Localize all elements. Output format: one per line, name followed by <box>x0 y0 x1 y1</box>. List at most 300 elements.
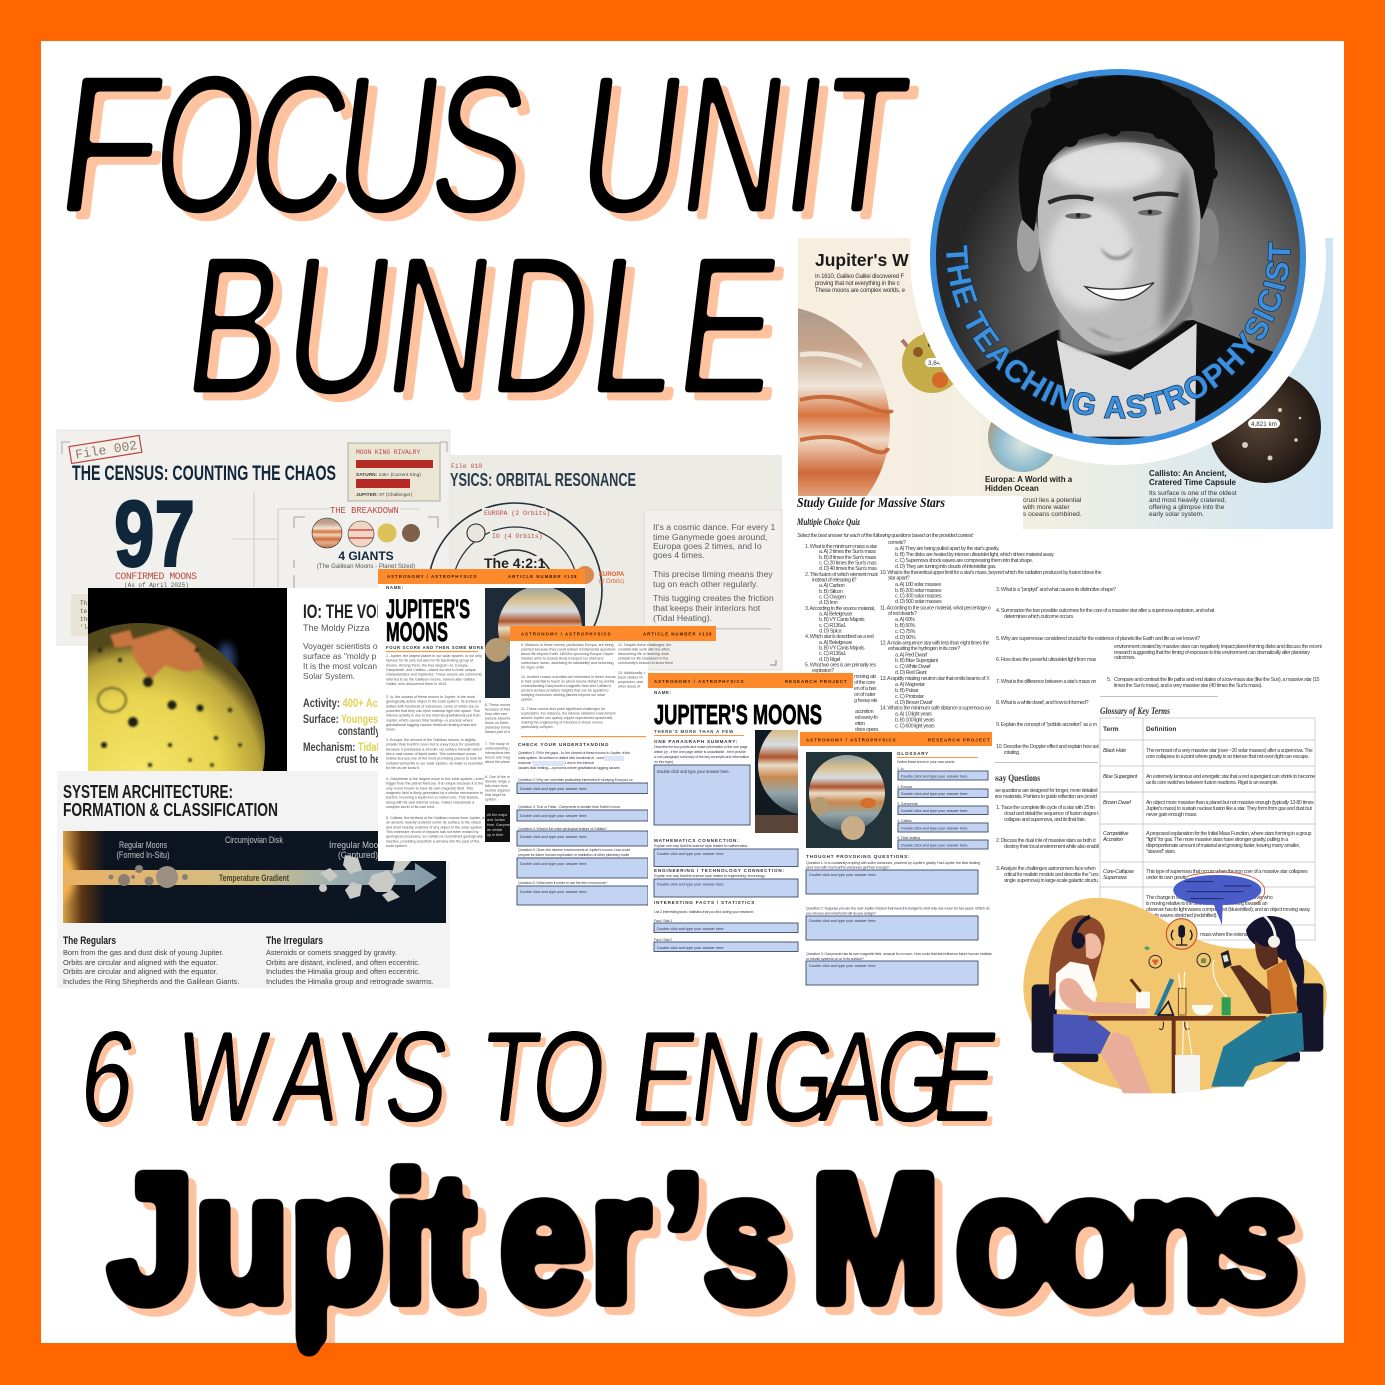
glossary table: Competitive <box>1103 831 1128 837</box>
quiz column 2: c. C) 300 solar masses <box>895 594 942 600</box>
panel: System Architecture slide: FORMATION & CLASSIFICATION <box>63 800 278 820</box>
header bar: ARTICLE NUMBER #138 <box>643 632 713 636</box>
glossary answer boxes: 2. Europa <box>897 785 913 789</box>
circular brand text: THE TEACHING ASTROPHYSICIST <box>946 242 1291 419</box>
thought question boxes: Double click and type your answer here. <box>809 873 877 877</box>
panel: article page 2: other areas of <box>618 684 640 688</box>
partial text fragments between pages: etion <box>855 721 865 727</box>
panel: Orbital Resonance slide: File 010 <box>451 463 482 470</box>
sticky note fragment: tel <box>80 608 91 615</box>
title lettering: O <box>143 36 270 254</box>
panel: Io volcanic slide: surface as "moldy p <box>303 651 377 661</box>
panel: article page 2: Question 5: Given the diverse environments of Jupiter's moons, how could <box>518 848 630 852</box>
panel: research project page 4: GLOSSARY <box>897 751 929 756</box>
article 2 body: about life beyond Earth. NASA's upcoming Europa Clipper <box>521 652 615 656</box>
second column fragment: forces and magnetic <box>485 756 518 760</box>
panel: article page 2: Question 4: What is the main geological feature of Callisto? <box>518 827 607 831</box>
panel: Orbital Resonance slide: (2 Orbits) <box>599 579 624 585</box>
second column fragment: those on Earth. <box>485 721 509 725</box>
panel: research project page 3: List 2 interesting facts / statistics that you find during your research: <box>654 910 754 914</box>
quiz column 2: a. A) 100 solar masses <box>895 582 942 588</box>
article body text: complex world of its own kind. <box>386 805 435 809</box>
subtitle: 6 ways to engage: 6 WAYS TO ENGAGE <box>79 1010 1010 1153</box>
hair <box>1019 75 1215 232</box>
article body text: inactive, providing scientists a window into the past of the <box>386 839 479 843</box>
quiz column 2: 13. A rapidly rotating neutron star that emits beams of X <box>880 676 990 682</box>
panel: Io volcanic slide: Voyager scientists o <box>303 641 378 651</box>
article body text: characteristics and mysteries. These moons are commonly <box>386 673 482 677</box>
quiz column 2: d. D) 90% <box>895 635 916 641</box>
explanatory text box: This precise timing means they <box>653 569 773 579</box>
article 2 body: particularly complex. <box>521 725 554 729</box>
panel: research project page 3: Double click and type your answer here. <box>657 852 725 856</box>
panel: article page 2: 12. Despite these challenges, the <box>618 643 671 647</box>
illustration: two people listening to a podcast <box>1023 872 1327 1093</box>
panel: article page 2: prepare for future human exploration or habitation of other planetary bodie <box>518 853 629 857</box>
panel: Study Guide document: single supernova) to large-scale galactic structu <box>1004 878 1098 884</box>
quiz column 2: d. D) They are turning into clouds of interstellar gas. <box>895 564 996 570</box>
panel: research project page 4: THOUGHT PROVOKING QUESTIONS: <box>806 854 910 859</box>
header bar <box>800 732 992 746</box>
second column fragment: diverse range of <box>485 780 511 784</box>
title lettering: U <box>568 36 697 254</box>
article 2 body: ancient surface provides insights that can be applied to <box>521 688 609 692</box>
article body text: Jupiter, which causes tidal heating—a process where <box>386 718 473 722</box>
quiz column 1: a. A) Betelgeuse <box>819 612 852 618</box>
essay question continuation <box>1107 644 1322 689</box>
essay question continuation: Compare and contrast the life paths and end states of a low-mass star (like the Sun), a massive star (15 <box>1114 677 1320 683</box>
explanatory text box: that keeps their interiors hot <box>653 603 761 613</box>
second column fragment: system. <box>485 798 497 802</box>
header bar: RESEARCH PROJECT <box>785 679 848 684</box>
quiz column 2: a. A) They are being pulled apart by the star's gravity. <box>895 546 999 552</box>
quiz column 1: a. A) 2 times the Sun's mass <box>819 549 876 555</box>
glossary table: has its waves stretched (redshifted). <box>1146 913 1217 919</box>
glossary answer boxes: 5. Tidal heating <box>897 836 920 840</box>
moon rivalry note: JUPITER: 97 (Challenger) <box>356 492 413 498</box>
answer boxes: Double click and type your answer here. <box>520 787 588 791</box>
quiz column 1: d. D) 40 times the Sun's mas <box>819 566 877 572</box>
short-answer column: 4. Summarize the two possible outcomes for the core of a massive star after a supernova explosion, and what <box>996 608 1215 614</box>
panel: Study Guide document: urce materials. Pointers to guide reflection are provid <box>993 794 1097 800</box>
panel: Jupiter's Worlds poster: Callisto: An Ancient, <box>1149 469 1227 478</box>
quiz column 2: c. C) 75% <box>895 629 916 635</box>
panel: Study Guide document: collapse and supernova, and its final fate. <box>1004 817 1086 823</box>
moon rivalry note <box>348 443 440 501</box>
glossary table: Brown Dwarf <box>1103 800 1131 806</box>
panel: article page 1: an orbital <box>487 828 502 832</box>
quiz column 1: a. A) Carbon <box>819 583 845 589</box>
header bar: ARTICLE NUMBER #138 <box>508 574 578 579</box>
quiz column 2 <box>880 540 1102 730</box>
panel: article page 2: Question 2: Why are scientists particularly interested in studying Europa's oc <box>518 778 633 782</box>
second column fragment: tide-rises from <box>485 784 508 788</box>
quiz column 1: 1. What is the minimum mass a star <box>805 544 877 550</box>
panel: research project page 4: Question 3: Ganymede has its own magnetic field, unusual for a moon. How could that field influence future human habitats <box>806 952 992 956</box>
panel: Io volcanic slide: crust to he <box>336 754 380 766</box>
panel: article page 2: Question 6: What does it mean to use the term exomoons? <box>518 881 607 885</box>
glossary table: observer has its light waves compressed (blueshifted), and an object moving away <box>1146 907 1310 913</box>
panel: article page 1: NAME: <box>386 585 404 590</box>
panel: The Census slide <box>57 430 450 645</box>
panel: research project page 3: Double click and type your answer here. <box>657 882 725 886</box>
yellow blob <box>1023 898 1327 1093</box>
header bar <box>510 626 716 641</box>
panel: Orbital Resonance slide: YSICS: ORBITAL RESONANCE <box>450 470 636 490</box>
panel: Jupiter's Worlds poster: early solar system. <box>1149 511 1204 518</box>
title lettering: F <box>47 35 176 254</box>
partial text fragments between pages: g heavy ele <box>854 698 877 704</box>
portrait badge: The Teaching Astrophysicist <box>910 69 1326 465</box>
glossary answer boxes <box>897 767 988 849</box>
article 2 body: making the engineering of missions to these moons <box>521 720 603 724</box>
text block: the regulars: Orbits are circular and aligned with the equator. <box>63 967 218 976</box>
glossary table: An extremely luminous and energetic star that a red supergiant can shrink to become <box>1146 774 1315 780</box>
panel: research project page 3: a one paragraph summary of the key concepts and information <box>654 755 749 759</box>
glossary table: An object more massive than a planet but not massive enough (typically 13-80 times <box>1146 800 1314 806</box>
quiz column 2: d. D) Red Giant <box>895 670 927 676</box>
quiz column 1 <box>805 544 878 674</box>
partial text fragments between pages: accretion <box>855 709 874 715</box>
sticky note fragment: the <box>80 616 91 623</box>
panel: Orbital Resonance slide: EUROPA (2 Orbits) <box>484 510 550 517</box>
glossary table: is moving relative to the source. An object moving towards an <box>1146 901 1268 907</box>
title: Focus Unit Bundle <box>47 35 928 443</box>
quiz column 2: b. B) Pulsar <box>895 688 919 694</box>
quiz column 2: c. C) 600 light years <box>895 724 935 730</box>
quiz column 1: c. C) R136a1 <box>819 651 846 657</box>
second column fragment: planets elsewhere <box>485 716 514 720</box>
glossary heading: Glossary of Key Terms <box>1100 706 1170 716</box>
panel: Study Guide document: Select the best answer for each of the following questions based on the provided context: <box>797 533 974 539</box>
article 2 body: 10. Another reason scientists are interested in these moons <box>521 675 616 679</box>
article body text: moon. <box>386 728 396 732</box>
quiz column 1: d. D) Spica <box>819 628 842 634</box>
quiz column 2: b. B) The disks are heated by intense ultraviolet light, which drives material away <box>895 552 1054 558</box>
answer boxes <box>517 783 648 905</box>
second column fragment: understanding of <box>485 746 512 750</box>
panel: article page 1: and Jovian <box>487 818 505 822</box>
sticky note fragment: 'los <box>80 624 95 631</box>
glossary table: Blue Supergiant <box>1103 774 1138 780</box>
moon rivalry note: SATURN: 146+ (Current King) <box>356 472 421 478</box>
article body text: an ancient, heavily cratered world. Its surface is the oldest <box>386 821 481 825</box>
thought question boxes <box>806 870 978 985</box>
essay question continuation: 5. <box>1107 677 1111 683</box>
panel: research project page 3: Explain one way that this science topic relates to engineering / technology. <box>654 874 765 878</box>
icon: heart and thumbs badges <box>1144 946 1210 968</box>
second column fragment: interactions between <box>485 751 518 755</box>
panel: research project page 3: Fact / Stat 1 <box>654 919 672 923</box>
text block: the irregulars: The Irregulars <box>266 935 323 947</box>
article body text: Earth's, involving a liquid iron or nickel core. This feature, <box>386 796 479 800</box>
quiz column 1: b. B) VY Canis Majoris <box>819 646 865 652</box>
article 2 body: studying exomoons orbiting planets beyond our solar <box>521 693 606 697</box>
panel: article page 2: propulsion, and <box>618 680 643 684</box>
short-answer column: 6. How does the powerful ultraviolet light from mas <box>996 657 1097 663</box>
title lettering: L <box>579 217 691 435</box>
panel: Io volcanic slide: Activity: 400+ Act <box>303 698 381 710</box>
quiz column 2: star apart? <box>888 576 910 582</box>
answer boxes: Double click and type your answer here. <box>520 862 588 866</box>
panel: Orbital Resonance slide: The 4:2:1 <box>484 555 546 571</box>
slide heading: SYSTEM ARCHITECTURE: <box>63 782 233 802</box>
headline: Jupiter's Moons: Jupiter’s Moons <box>116 1144 1307 1348</box>
short-answer column: 8. What is a white dwarf, and how is it formed? <box>996 700 1089 706</box>
title lettering: I <box>773 36 839 254</box>
glossary answer boxes: Double click and type your answer here. <box>901 809 969 813</box>
quiz column 2: a. A) 60% <box>895 617 915 623</box>
header bar: ASTRONOMY / ASTROPHYSICS <box>521 632 612 636</box>
panel: article page 2: considerable work with the effort, <box>618 648 670 652</box>
quiz column 1: 3. According to the source material, <box>805 606 876 612</box>
temperature gradient diagram: Irregular Moons <box>329 840 387 851</box>
chairs <box>1032 983 1323 1062</box>
panel: Io volcanic slide: Solar System. <box>303 671 355 681</box>
panel: research project page 3: Fact / Stat 2 <box>654 938 672 942</box>
summary answer box <box>654 765 750 825</box>
text block: the regulars: Born from the gas and dust disk of young Jupiter. <box>63 948 224 957</box>
short-answer column: rotating. <box>1004 750 1020 756</box>
article 2 body: for signs of life. <box>521 666 545 670</box>
panel: Jupiter's Worlds poster: and most heavily cratered, <box>1149 497 1226 504</box>
panel: Io volcanic slide <box>88 588 378 771</box>
title shadow: U <box>577 44 706 262</box>
panel: article page 1: All the major <box>487 813 508 817</box>
photo of Io <box>88 623 265 771</box>
panel: article page 2: reasons! This volcanic activity is due to the internal <box>518 761 594 765</box>
panel: article page 2: 13. Additionally, t <box>618 671 645 675</box>
panel: article page 1: up in their <box>487 833 504 837</box>
panel: article page 2: Each rotates mi <box>618 676 643 680</box>
glossary table: The change in wavelength of light in relation to an observer who <box>1146 895 1273 901</box>
project title: JUPITER'S MOONS <box>654 699 822 730</box>
panel: research project page 4: you choose and what tools will do you assign? <box>806 912 876 916</box>
moon rivalry note: MOON KING RIVALRY <box>356 449 420 456</box>
temperature gradient diagram: (Captured) <box>338 850 378 861</box>
article body text: dotted with hundreds of volcanoes, some of which are so <box>386 704 479 708</box>
quiz column 1: c. C) Oxygen <box>819 594 846 600</box>
study guide heading: Study Guide for Massive Stars <box>797 496 945 511</box>
header bar: ASTRONOMY / ASTROPHYSICS <box>387 574 478 579</box>
article 2 body: exploration. For instance, the intense radiation environment <box>521 712 616 716</box>
quiz column 1: 5. What two ores is are primarily res <box>805 662 877 668</box>
title lettering: U <box>324 35 454 254</box>
glossary answer boxes: 4. Callisto <box>897 819 912 823</box>
panel: research project page 3: Explain one way that this science topic relates to mathematics. <box>654 844 748 848</box>
panel: Study Guide document: ese questions are designed for longer, more detailed <box>993 788 1098 794</box>
title shadow: I <box>782 44 848 262</box>
big number 97: 97 <box>114 481 195 586</box>
article body text: and most heavily cratered of any object in the solar system. <box>386 825 483 829</box>
article 2 body: is their potential to teach us about moons distant by worlds. <box>521 680 615 684</box>
temperature gradient diagram: Circumjovian Disk <box>225 835 283 846</box>
panel: The Census slide: (As of April 2025) <box>124 582 189 589</box>
explanatory text box: This tugging creates the friction <box>653 593 774 603</box>
article body text: geological processes, so Callisto is considered geologically <box>386 835 483 839</box>
article 2 body: 9. Missions to these moons, particularly Europa, are being <box>521 643 614 647</box>
short-answer column: 3. What is a "proplyd" and what causes its distinctive shape? <box>996 587 1116 593</box>
text block: the regulars: Orbits are circular and aligned with the equator. <box>63 958 218 967</box>
article body text <box>386 654 485 848</box>
title lettering: N <box>376 217 505 435</box>
quiz column 2: d. D) 500 solar masses <box>895 599 942 605</box>
panel: research project page 3: INTERESTING FACTS / STATISTICS <box>654 900 755 905</box>
icon: microphone badge <box>1166 919 1197 949</box>
panel: research project page 4: Question 1: Io is constantly erupting with sulfur volcanoes, powered by Jupiter's gravity. Had Jupiter, the tidal heating <box>806 861 980 865</box>
answer boxes: Double click and type your answer here. <box>520 890 588 894</box>
panel: Jupiter's Worlds poster: These moons are complex worlds, e <box>815 288 906 294</box>
article body text: intense activity is due to the internal gravitational pull from <box>386 714 480 718</box>
quiz column 2: a. A) 10 light years <box>895 712 932 718</box>
title shadow <box>56 43 928 443</box>
quiz column 1: a. A) Betelgeuse <box>819 640 852 646</box>
left woman <box>1049 915 1152 1093</box>
quiz column 2: of red dwarfs? <box>888 611 917 617</box>
title lettering: B <box>176 216 296 435</box>
quiz column 2: c. C) Supernova shock waves are compressing them into that shape. <box>895 558 1033 564</box>
title shadow: L <box>588 225 700 443</box>
quiz column 1: explosion? <box>812 668 834 674</box>
article body text: 1. Jupiter, the largest planet in our solar system, is not only <box>386 654 482 658</box>
article body text: smaller than Earth's moon but is a key focus for scientists <box>386 743 480 747</box>
glossary table: core collapses to a point where gravity is so intense that not even light can escape. <box>1146 754 1309 760</box>
panel: article page 2: discovering life or learning more <box>618 652 669 656</box>
panel: Jupiter's Worlds poster: proving that not everything in the c <box>815 281 900 287</box>
quiz column 2: 10. What is the theoretical upper limit for a star's mass, beyond which the radiation produced by fusion blows the <box>880 570 1102 576</box>
panel: article page 2: community's beacon to know them <box>618 661 673 665</box>
panel: article page 2 <box>510 626 716 911</box>
title shadow: N <box>679 44 808 262</box>
explanatory text box: Europa goes 2 times, and Io <box>653 541 762 551</box>
sticky note fragment <box>71 594 95 636</box>
second column fragment: because of their <box>485 708 511 712</box>
panel: Study Guide document: ssay Questions <box>993 774 1040 784</box>
glossary answer boxes: Double click and type your answer here. <box>901 826 969 830</box>
article title <box>386 594 470 647</box>
panel: research project page 4: Define these terms in your own words: <box>897 760 955 764</box>
title shadow: F <box>56 43 185 262</box>
quiz column 2: b. B) 50% <box>895 623 916 629</box>
title lettering: N <box>670 36 799 254</box>
panel: The Census slide: CONFIRMED MOONS <box>115 571 197 582</box>
quiz column 2: d. D) Brown Dwarf <box>895 700 933 706</box>
panel: Jupiter's Worlds poster: In 1610, Galileo Galilei discovered F <box>815 274 905 280</box>
header bar <box>648 673 853 688</box>
title lettering: U <box>274 215 406 435</box>
title shadow: U <box>283 223 415 443</box>
panel: Jupiter's Worlds poster: offering a glimpse into the <box>1149 504 1225 511</box>
article title: MOONS <box>386 617 448 647</box>
article body text: famous for its size but also for its fascinating group of <box>386 659 474 663</box>
second column fragment: neutral organisms <box>485 788 514 792</box>
panel: Jupiter's Worlds poster: Jupiter's W <box>815 250 909 270</box>
glossary table: Accretion <box>1102 837 1123 843</box>
panel: article page 2: solar system. Its surface is dotted with hundreds of , some of wh <box>518 756 614 760</box>
header bar: ASTRONOMY / ASTROPHYSICS <box>806 738 897 742</box>
article body text: referred to as the Galilean moons, named after Galileo <box>386 677 475 681</box>
portrait photo <box>952 75 1300 439</box>
glossary table: A proposed explanation for the Initial Mass Function, where stars forming in a group <box>1146 831 1312 837</box>
glossary table: Term <box>1103 726 1119 733</box>
file stamp: File 002 <box>74 438 138 463</box>
answer boxes: Double click and type your answer here. <box>520 814 588 818</box>
title shadow: N <box>385 225 514 443</box>
headline: Jupiter's Moons: Jupiter’s Moons <box>108 1136 1299 1340</box>
header bar <box>378 569 585 584</box>
short-answer column <box>996 587 1215 756</box>
census title: THE CENSUS: COUNTING THE CHAOS <box>72 462 336 485</box>
glossary table: Core-Collapse <box>1103 869 1134 875</box>
panel: Study Guide document: with more water <box>1022 504 1070 511</box>
article illustration <box>485 586 585 698</box>
short-answer column: 9. Explain the concept of "pebble accretion" as a m <box>996 722 1098 728</box>
panel: research project page 3: article (or - if the one page article is unavailable - then provide <box>654 750 746 754</box>
panel: Study Guide document: destroy their local environment while also enabli <box>1004 844 1099 850</box>
glossary answer boxes: Double click and type your answer here. <box>901 844 969 848</box>
article body text: 4. Ganymede is the largest moon in the solar system—even <box>386 777 484 781</box>
speech bubble <box>1173 872 1265 925</box>
glossary table: "fight" for gas. The more massive stars have stronger gravity, pulling in a <box>1146 837 1288 843</box>
quiz column 2: b. B) 200 solar masses <box>895 588 942 594</box>
article body text: lies a vast ocean of liquid water. This subsurface ocean <box>386 752 476 756</box>
second column fragment: distant part of the <box>485 730 513 734</box>
glossary table: This type of supernova that occurs when the iron core of a massive star collapses <box>1146 869 1308 875</box>
panel: Orbital Resonance slide: EUROPA <box>599 572 625 578</box>
title shadow: S <box>429 43 549 262</box>
article body text: 3. Europa, the second of the Galilean moons, is slightly <box>386 738 476 742</box>
panel: Study Guide document: crust lies a potential <box>1023 497 1082 504</box>
article body text: bigger than the planet Mercury. It is unique because it is the <box>386 782 483 786</box>
glossary answer boxes: 3. Ganymede <box>897 802 918 806</box>
article body text: Ganymede, and Callisto—stand out due to their unique <box>386 668 476 672</box>
title shadow: C <box>246 43 370 262</box>
article 2 body: planned because they could answer fundamental questions <box>521 648 616 652</box>
article 2 body: subsurface ocean, assessing its habitability and searching <box>521 661 614 665</box>
partial text fragments between pages <box>854 674 878 733</box>
header bar: ASTRONOMY / ASTROPHYSICS <box>654 679 745 684</box>
essay question continuation: environment created by massive stars can negatively impact planet-forming disks and discuss the recent <box>1114 644 1322 650</box>
panel: Jupiter's Worlds poster: Cratered Time Capsule <box>1149 478 1237 487</box>
glossary answer boxes: 1. Io <box>897 767 904 771</box>
title shadow: T <box>819 43 928 262</box>
thought question boxes: Double click and type your answer here. <box>809 964 877 968</box>
partial text fragments between pages: of the core <box>854 680 875 686</box>
title lettering: T <box>810 35 919 254</box>
article body text: moons. Among them, the four largest—Io, Europa, <box>386 663 468 667</box>
text block: the regulars: The Regulars <box>63 935 116 947</box>
explanatory text box: tug on each other regularly. <box>653 579 758 589</box>
panel: Io volcanic slide: It is the most volcan <box>303 661 377 671</box>
glossary table: disproportionate amount of material and growing faster, leaving many smaller, <box>1146 843 1301 849</box>
panel: research project page 3: NAME: <box>654 690 672 695</box>
panel: Study Guide document: 1. Trace the complete life cycle of a star with 25 tin <box>996 805 1095 811</box>
panel: article page 1: FOUR SCORE AND THEN SOME MORE <box>386 645 484 650</box>
glossary table <box>1100 718 1315 940</box>
resonance orbits diagram <box>428 503 602 677</box>
explanatory text box: (Tidal Heating). <box>653 613 712 623</box>
text block: the irregulars: Includes the Himalia group and often eccentric. <box>266 967 420 976</box>
panel: The Census slide: (The Galilean Moons - Planet Sized) <box>317 563 415 570</box>
text block: the irregulars: Includes the Himalia group and retrograde swarms. <box>266 977 434 986</box>
glossary table: "starved" stars. <box>1146 849 1176 855</box>
panel: The Census slide: THE BREAKDOWN <box>330 506 399 516</box>
glossary table: Black Hole <box>1103 748 1126 754</box>
icon: four giant moons <box>312 518 420 548</box>
article 2 body: around Jupiter can quickly cripple unprotected spacecraft, <box>521 716 613 720</box>
quiz column 2: 11. According to the source material, what percentage o <box>880 606 991 612</box>
glossary table: Jupiter's mass) to sustain nuclear fusion like a star. They form from gas and dust but <box>1146 806 1312 812</box>
